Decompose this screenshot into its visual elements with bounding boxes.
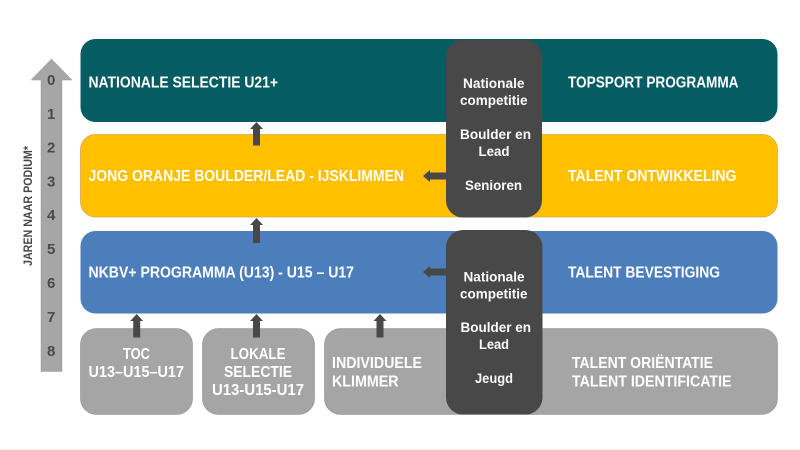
panel: competitie jeugd [446, 230, 542, 414]
panel: competitie senioren: Lead [478, 143, 510, 159]
panel: competitie senioren: competitie [460, 92, 528, 108]
panel: competitie jeugd: competitie [460, 286, 528, 302]
axis label: JAREN NAAR PODIUM* [21, 146, 35, 266]
panel: competitie jeugd: Jeugd [475, 370, 513, 386]
arrow: jeugd to nkbv+ [423, 266, 447, 278]
panel: individuele klimmer: TALENT ORIËNTATIE [572, 355, 713, 372]
axis: years to podium arrow: 1 [47, 106, 55, 123]
panel: competitie senioren: Boulder en [460, 126, 531, 142]
arrow: up to jong oranje [250, 218, 263, 243]
panel: jong oranje: TALENT ONTWIKKELING [568, 168, 737, 185]
arrow: lokale selectie up [250, 314, 263, 338]
panel: nationale selectie: TOPSPORT PROGRAMMA [568, 74, 738, 92]
panel: competitie senioren: Nationale [463, 75, 525, 91]
arrow: senioren to jong oranje [423, 170, 447, 182]
axis: years to podium arrow: 4 [47, 207, 56, 224]
arrow: toc up [130, 314, 143, 338]
panel: jong oranje [80, 134, 778, 217]
panel: nkbv+ programma [80, 231, 778, 314]
panel: individuele klimmer: INDIVIDUELE [332, 355, 422, 372]
panel: competitie senioren [446, 40, 542, 218]
panel: nationale selectie [80, 39, 778, 122]
panel: lokale selectie: LOKALE [230, 346, 286, 363]
arrow: up to nationale selectie [250, 122, 263, 146]
axis: years to podium arrow: 7 [47, 309, 55, 326]
panel: toc: U13–U15–U17 [88, 364, 184, 381]
panel: individuele klimmer [324, 328, 778, 414]
panel: nationale selectie: NATIONALE SELECTIE U21+ [88, 74, 278, 92]
axis: years to podium arrow: 8 [47, 343, 55, 360]
panel: competitie jeugd: Boulder en [460, 319, 531, 335]
axis: years to podium arrow: 5 [47, 241, 55, 258]
panel: nkbv+ programma: NKBV+ PROGRAMMA (U13) - U15 – U17 [88, 264, 354, 282]
panel: lokale selectie: SELECTIE [224, 364, 292, 381]
arrow: individuele klimmer up [374, 314, 386, 338]
panel: toc [80, 328, 192, 414]
panel: individuele klimmer: KLIMMER [332, 374, 398, 390]
panel: individuele klimmer: TALENT IDENTIFICATIE [572, 374, 732, 390]
axis: years to podium arrow [31, 59, 72, 372]
panel: competitie jeugd: Nationale [464, 268, 525, 284]
panel: lokale selectie: U13-U15-U17 [212, 382, 304, 399]
panel: nkbv+ programma: TALENT BEVESTIGING [568, 264, 720, 282]
axis: years to podium arrow: 6 [47, 275, 55, 292]
panel: competitie senioren: Senioren [465, 177, 522, 193]
axis: years to podium arrow: 2 [47, 140, 55, 156]
panel: toc: TOC [123, 346, 150, 363]
panel: jong oranje: JONG ORANJE BOULDER/LEAD - IJSKLIMMEN [88, 168, 404, 185]
panel: lokale selectie [202, 328, 314, 414]
axis: years to podium arrow: 3 [47, 174, 55, 190]
axis: years to podium arrow: 0 [47, 72, 55, 89]
panel: competitie jeugd: Lead [479, 336, 509, 352]
